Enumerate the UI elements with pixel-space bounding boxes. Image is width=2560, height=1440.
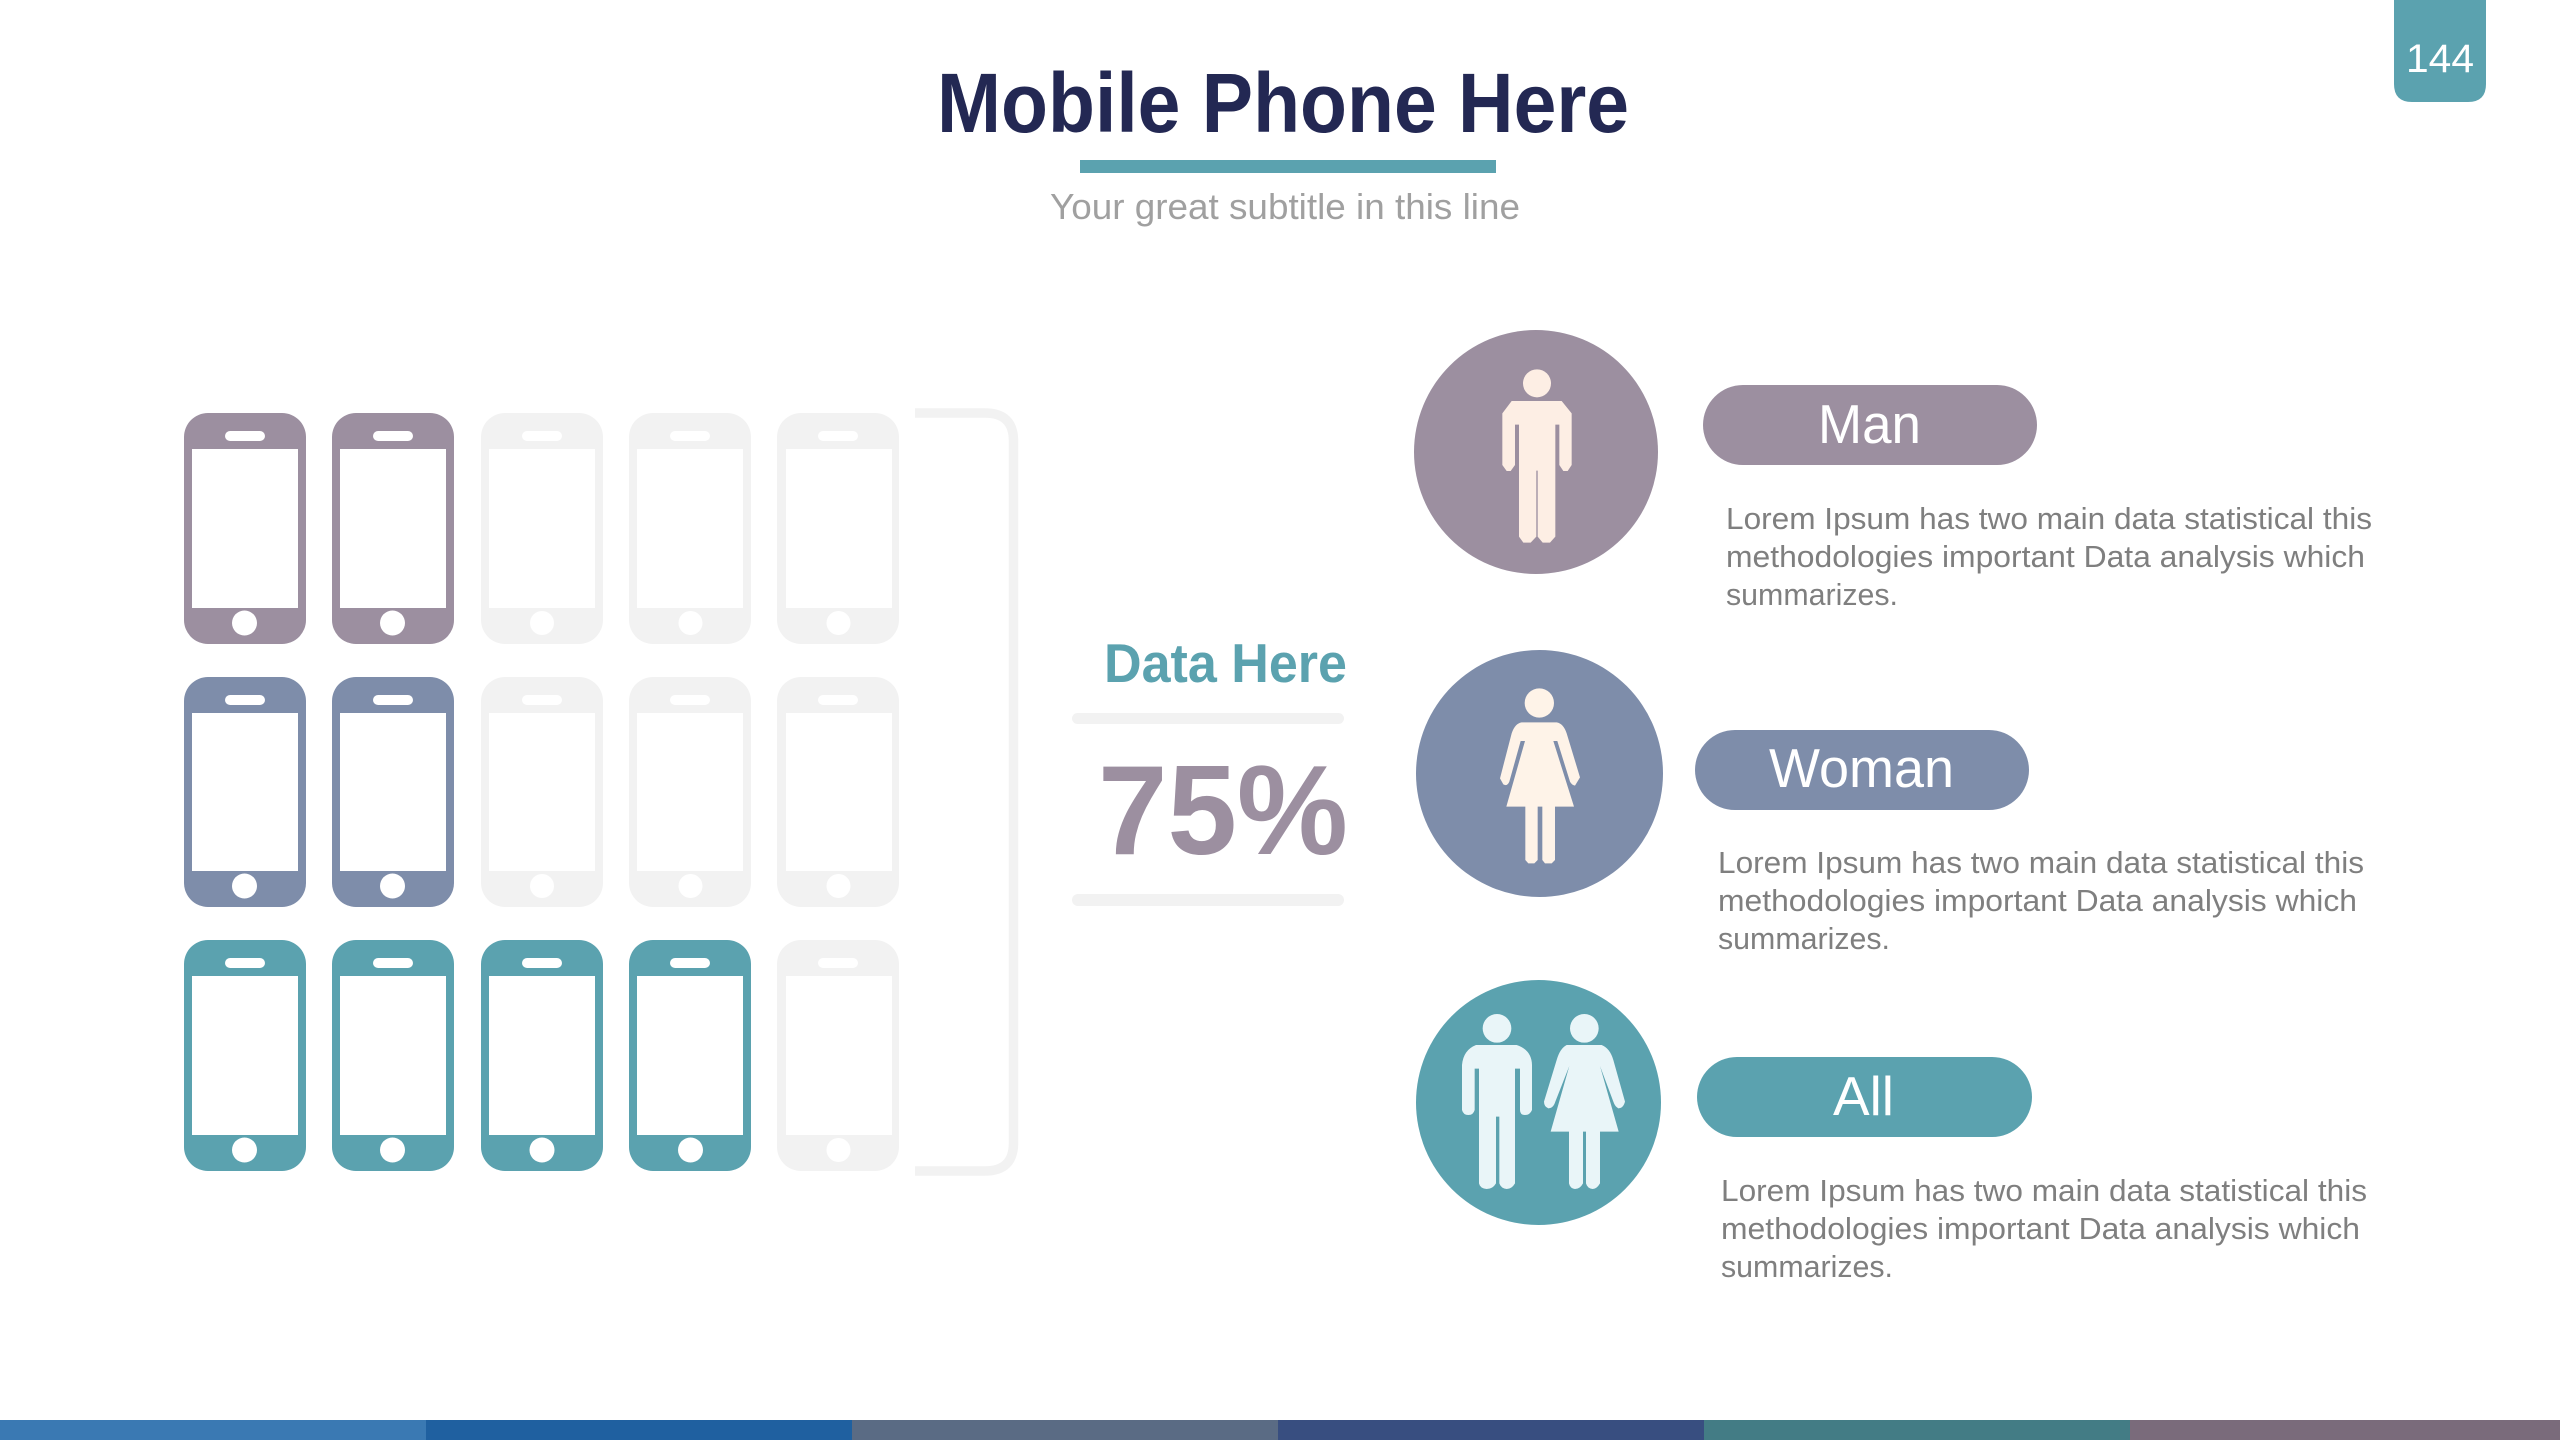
icon: woman in circle (1416, 650, 1663, 897)
description: man: summarizes. (1726, 577, 1898, 612)
pill label: all (1697, 1057, 2032, 1137)
phone icon: inactive (629, 413, 751, 644)
description: all: methodologies important Data analysis which (1721, 1211, 2360, 1246)
phone icon: teal (629, 940, 751, 1171)
description: woman: methodologies important Data analysis which (1718, 883, 2357, 918)
data label: Data Here (1104, 632, 1347, 694)
icon: man in circle (1414, 330, 1658, 574)
row: all (1416, 980, 2367, 1284)
description: all: summarizes. (1721, 1249, 1893, 1284)
page number tab (2394, 0, 2486, 102)
phone icon: inactive (777, 940, 899, 1171)
percentage value: 75% (1098, 739, 1348, 881)
pill label: woman: Woman (1769, 737, 1954, 799)
callout rule bottom (1072, 894, 1344, 906)
phone icon: teal (332, 940, 454, 1171)
phone row 3 (184, 940, 899, 1171)
callout rule top (1072, 713, 1344, 724)
page number tab: 144 (2406, 37, 2474, 81)
description: all (1721, 1173, 2367, 1284)
phone icon: inactive (629, 677, 751, 907)
subtitle: Your great subtitle in this line (1050, 186, 1520, 227)
description: man (1726, 501, 2372, 612)
phone icon: inactive (481, 677, 603, 907)
pill label: man (1703, 385, 2037, 465)
bracket (915, 413, 1014, 1171)
data callout (1072, 632, 1348, 906)
phone icon: inactive (777, 677, 899, 907)
description: man: Lorem Ipsum has two main data statistical this (1726, 501, 2372, 536)
description: man: methodologies important Data analysis which (1726, 539, 2365, 574)
phone icon: teal (481, 940, 603, 1171)
phone icon: blue (332, 677, 454, 907)
description: woman (1718, 845, 2364, 956)
title underline (1080, 160, 1496, 173)
icon: man and woman in circle (1416, 980, 1661, 1225)
description: woman: summarizes. (1718, 921, 1890, 956)
phone icon: inactive (777, 413, 899, 644)
phone row 1 (184, 413, 899, 644)
pill label: woman (1695, 730, 2029, 810)
description: all: Lorem Ipsum has two main data statistical this (1721, 1173, 2367, 1208)
phone icon: purple (332, 413, 454, 644)
phone row 2 (184, 677, 899, 907)
phone icon: teal (184, 940, 306, 1171)
row: woman (1416, 650, 2364, 956)
phone icon: blue (184, 677, 306, 907)
description: woman: Lorem Ipsum has two main data statistical this (1718, 845, 2364, 880)
title: Mobile Phone Here (937, 56, 1629, 150)
phone icon: inactive (481, 413, 603, 644)
pill label: man: Man (1818, 393, 1921, 455)
phone icon: purple (184, 413, 306, 644)
row: man (1414, 330, 2372, 612)
phone grid (184, 413, 899, 1171)
footer colour band (0, 1420, 2560, 1440)
pill label: all: All (1833, 1065, 1894, 1127)
